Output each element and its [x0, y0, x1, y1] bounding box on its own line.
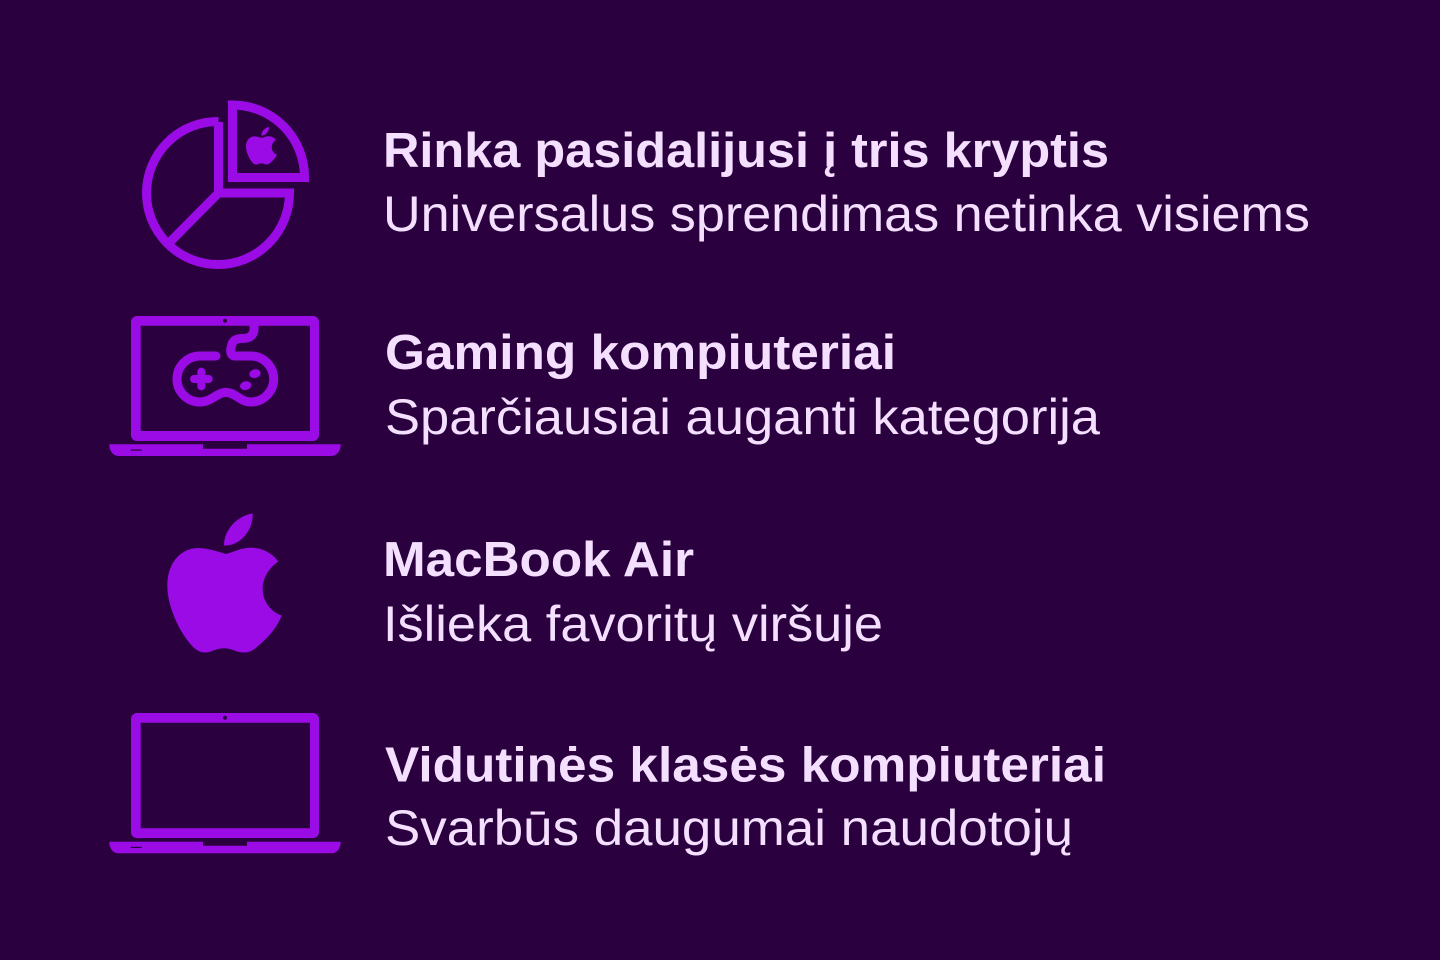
heading: MacBook Air: MacBook Air: [383, 533, 694, 587]
row: gaming laptops: [109, 316, 1100, 456]
icon: pie chart with apple slice: [147, 105, 305, 264]
text: gaming laptops subtitle: Sparčiausiai auganti kategorija: [385, 389, 1100, 445]
heading: gaming laptops: Gaming kompiuteriai: [385, 326, 896, 380]
text: mid-range laptops subtitle: Svarbūs daugumai naudotojų: [385, 800, 1073, 856]
row: MacBook Air: [167, 513, 883, 653]
heading: mid-range laptops: Vidutinės klasės kompiuteriai: [385, 738, 1106, 792]
row: mid-range laptops: [109, 713, 1106, 856]
icon: laptop with gamepad: [109, 316, 341, 456]
row: market split: [147, 105, 1310, 264]
text: market split subtitle: Universalus sprendimas netinka visiems: [383, 186, 1310, 242]
text: MacBook Air subtitle: Išlieka favoritų viršuje: [383, 596, 883, 652]
icon: apple logo: [167, 513, 282, 653]
heading: market split: Rinka pasidalijusi į tris kryptis: [383, 124, 1109, 178]
icon: laptop: [109, 713, 341, 853]
